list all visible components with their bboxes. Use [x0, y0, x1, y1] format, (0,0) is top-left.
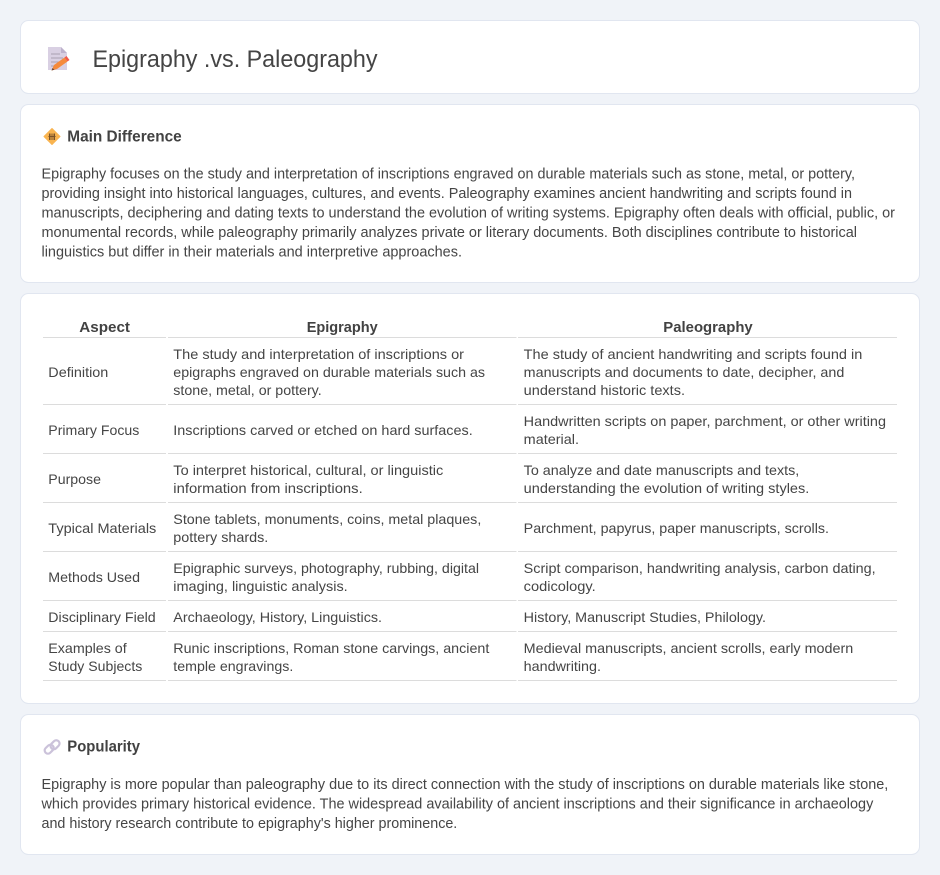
- table row: examples of study subjects: [48, 640, 853, 674]
- table row: typical materials: Parchment, papyrus, paper manuscripts, scrolls.: [524, 520, 829, 536]
- table row: methods used: [48, 560, 876, 594]
- table row: definition: The study and interpretation of inscriptions or: [173, 346, 464, 362]
- text block: main difference: linguistics but differ in their materials and interpretive approaches.: [42, 244, 462, 260]
- panel: title card: [20, 20, 920, 94]
- heading: main difference: Main Difference: [67, 128, 182, 146]
- text block: main difference: manuscripts, deciphering and dating texts to understand the evolution of writing systems. Epigraphy often deals with official, public, or: [42, 206, 895, 222]
- table row: methods used: codicology.: [524, 578, 596, 594]
- table row: examples of study subjects: handwriting.: [524, 658, 601, 674]
- table row: methods used: Epigraphic surveys, photography, rubbing, digital: [173, 560, 479, 576]
- table row: examples of study subjects: Runic inscriptions, Roman stone carvings, ancient: [173, 640, 489, 656]
- table header: Paleography: [663, 319, 753, 336]
- table row: purpose: understanding the evolution of writing styles.: [524, 480, 809, 496]
- text block: main difference: providing insight into historical languages, cultures, and events. Paleography examines ancient handwriting and scripts found in: [42, 186, 852, 202]
- panel: main difference: [20, 104, 920, 282]
- table row: definition: manuscripts and documents to date, decipher, and: [524, 364, 844, 380]
- table row: purpose: information from inscriptions.: [173, 480, 363, 496]
- table row: definition: [48, 346, 862, 398]
- title: Epigraphy .vs. Paleography: [92, 46, 378, 73]
- table row: purpose: [48, 462, 809, 496]
- table row: primary focus: Handwritten scripts on paper, parchment, or other writing: [524, 413, 886, 429]
- text block: popularity: which provides primary historical evidence. The widespread availability of ancient inscriptions and their significance in archaeology: [40, 796, 874, 812]
- table row: purpose: Purpose: [48, 471, 101, 487]
- table row: examples of study subjects: Medieval manuscripts, ancient scrolls, early modern: [524, 640, 853, 656]
- table row: examples of study subjects: temple engravings.: [173, 658, 293, 674]
- table row: typical materials: pottery shards.: [173, 529, 268, 545]
- table row: typical materials: [48, 511, 829, 545]
- table row: methods used: Methods Used: [48, 569, 140, 585]
- table header: [79, 319, 753, 336]
- table row: definition: understand historic texts.: [524, 382, 685, 398]
- text block: popularity: [40, 777, 888, 832]
- table row: primary focus: [48, 413, 886, 447]
- table row: methods used: Script comparison, handwriting analysis, carbon dating,: [524, 560, 876, 576]
- table header: Epigraphy: [307, 319, 378, 336]
- icon: chain link: [43, 739, 61, 755]
- table row: disciplinary field: Archaeology, History, Linguistics.: [173, 609, 382, 625]
- heading: popularity: Popularity: [67, 738, 140, 756]
- table row: definition: The study of ancient handwriting and scripts found in: [524, 346, 862, 362]
- table row: definition: Definition: [48, 364, 108, 380]
- text block: main difference: Epigraphy focuses on the study and interpretation of inscriptions engraved on durable materials such as stone, metal, or pottery,: [42, 166, 855, 182]
- text block: popularity: Epigraphy is more popular than paleography due to its direct connection with the study of inscriptions on durable materials like stone,: [42, 777, 888, 793]
- table row: purpose: To interpret historical, cultural, or linguistic: [173, 462, 443, 478]
- table row: disciplinary field: Disciplinary Field: [48, 609, 156, 625]
- table header: Aspect: [79, 319, 130, 336]
- table row: typical materials: Typical Materials: [48, 520, 156, 536]
- table row: disciplinary field: [48, 609, 766, 625]
- panel: popularity: [20, 714, 920, 854]
- table row: methods used: imaging, linguistic analysis.: [173, 578, 348, 594]
- table row: primary focus: Primary Focus: [48, 422, 139, 438]
- text block: main difference: [42, 166, 895, 260]
- table row: purpose: To analyze and date manuscripts and texts,: [524, 462, 799, 478]
- text block: popularity: and history research contribute to epigraphy's higher prominence.: [42, 816, 457, 832]
- table row: primary focus: Inscriptions carved or etched on hard surfaces.: [173, 422, 473, 438]
- table row: definition: stone, metal, or pottery.: [173, 382, 322, 398]
- table row: examples of study subjects: Study Subjects: [48, 658, 142, 674]
- panel: comparison table: [20, 294, 920, 704]
- table row: definition: epigraphs engraved on durable materials such as: [173, 364, 485, 380]
- table row: examples of study subjects: Examples of: [48, 640, 127, 656]
- table row: typical materials: Stone tablets, monuments, coins, metal plaques,: [173, 511, 481, 527]
- text block: main difference: monumental records, while paleography primarily analyzes private or literary documents. Both disciplines contribute to historical: [42, 225, 857, 241]
- table row: primary focus: material.: [524, 431, 579, 447]
- icon: document with pencil: [48, 47, 70, 70]
- table row: disciplinary field: History, Manuscript Studies, Philology.: [524, 609, 766, 625]
- icon: warning diamond: [44, 128, 60, 144]
